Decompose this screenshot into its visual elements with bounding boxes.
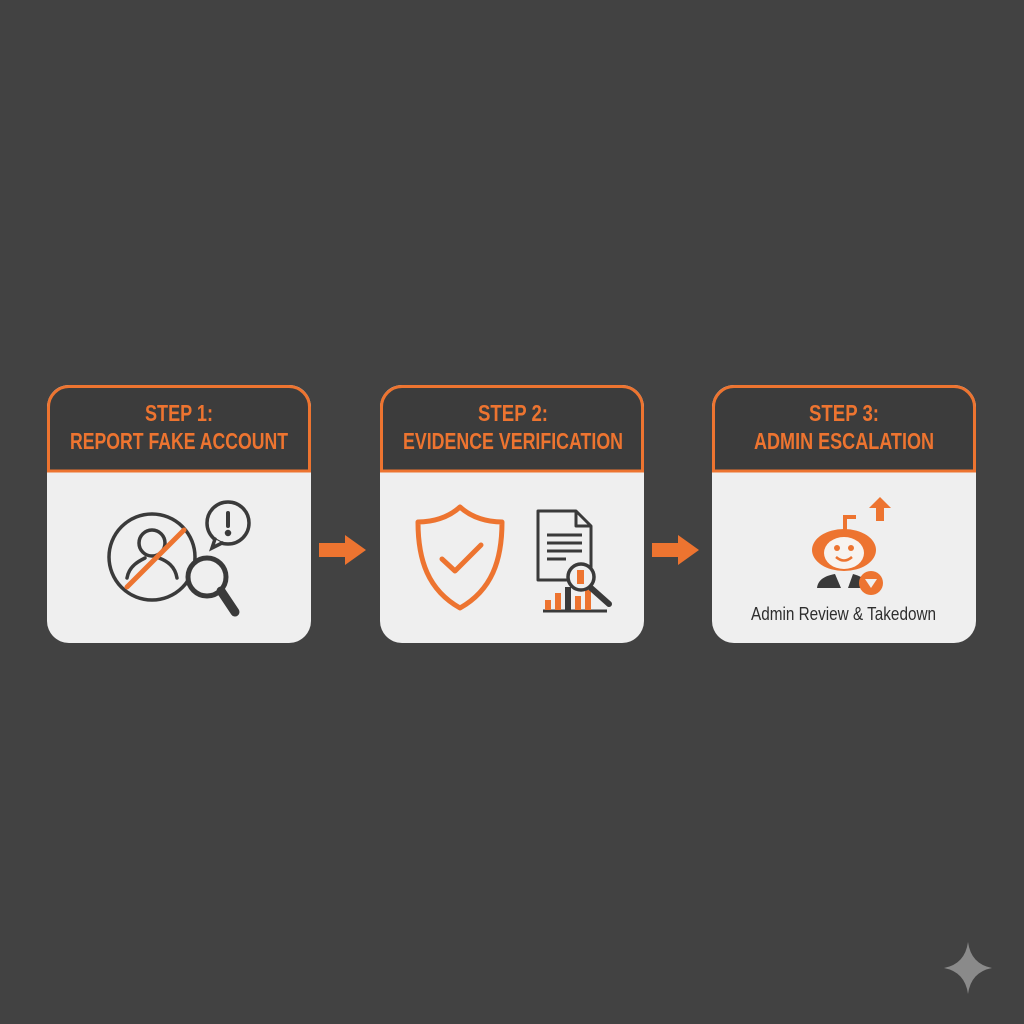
arrow 1: [319, 535, 366, 565]
icon: fake user with magnifier: [109, 502, 249, 612]
icon: sparkle: [944, 942, 992, 994]
heading: step 1: [70, 400, 288, 454]
heading: step 2: [403, 400, 623, 454]
arrow 2: [652, 535, 699, 565]
icon: shield check: [418, 507, 502, 608]
panel: step 1: [47, 385, 311, 643]
heading: step 3: [754, 400, 934, 454]
heading: step 3: STEP 3:: [809, 400, 879, 426]
panel: step 3: [712, 385, 976, 643]
heading: step 1: REPORT FAKE ACCOUNT: [70, 428, 288, 454]
heading: step 3: ADMIN ESCALATION: [754, 428, 934, 454]
icon: document with chart and magnifier: [538, 511, 609, 611]
heading: step 2: STEP 2:: [478, 400, 548, 426]
heading: step 1: STEP 1:: [145, 400, 213, 426]
panel: step 2: [380, 385, 644, 643]
text: admin review: Admin Review & Takedown: [751, 604, 936, 624]
heading: step 2: EVIDENCE VERIFICATION: [403, 428, 623, 454]
icon: admin robot: [812, 497, 891, 595]
